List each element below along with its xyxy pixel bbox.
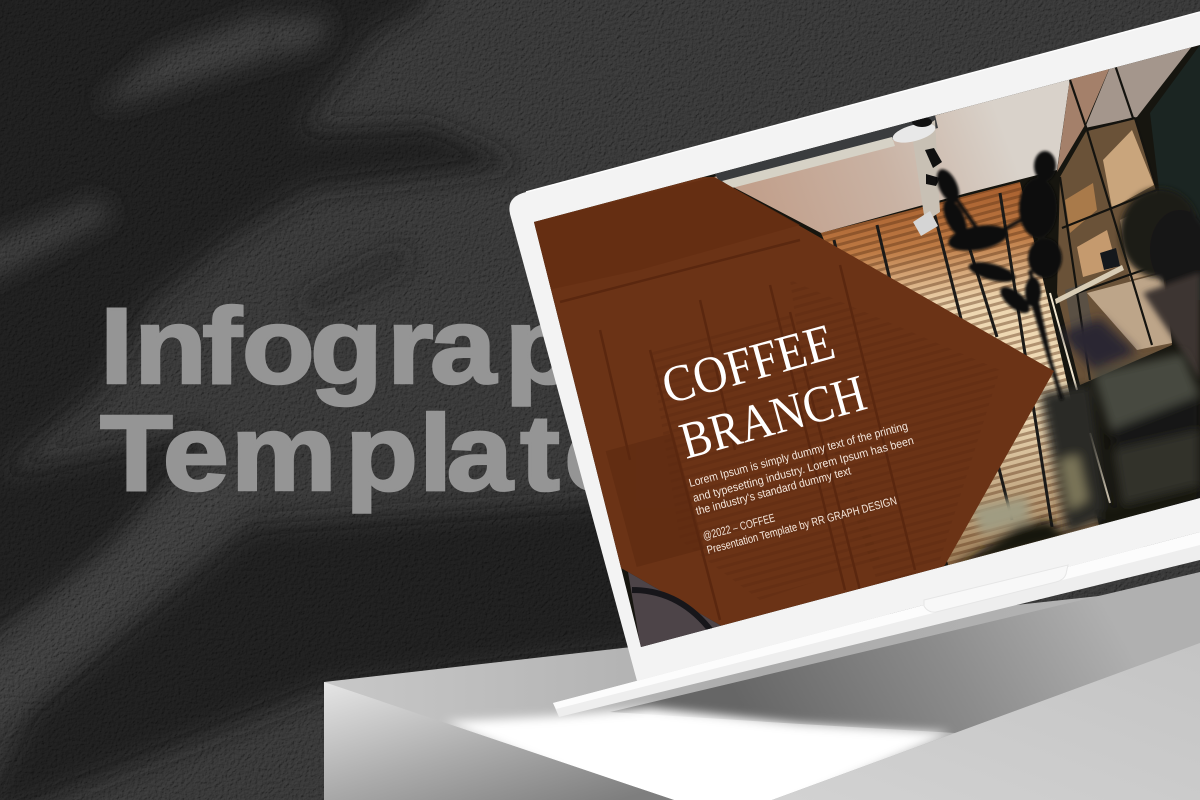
dark right side wall	[1150, 45, 1200, 220]
brown overlay shape	[500, 177, 1054, 640]
window blinds	[821, 182, 1100, 570]
laptop bezel	[509, 12, 1200, 681]
window dark mullions	[834, 193, 1052, 527]
table back top surface	[324, 585, 1200, 800]
screen body paragraph: Lorem Ipsum is simply dummy text of the printing	[688, 421, 909, 490]
laptop	[500, 12, 1200, 717]
track lights	[891, 117, 942, 236]
screen body paragraph: and typesetting industry. Lorem Ipsum has been	[692, 435, 915, 505]
table right face	[772, 643, 1200, 800]
window frame highlight	[1050, 293, 1110, 503]
screen title: COFFEE BRANCH	[656, 314, 872, 471]
white pedestal table	[324, 572, 1200, 800]
table left face	[324, 682, 674, 800]
leaf shadow dark shapes	[0, 0, 650, 800]
screen body paragraph: the industry's standard dummy text	[695, 465, 853, 518]
overlay interior ghost photo	[560, 239, 916, 620]
laptop cast shadow	[610, 572, 1200, 733]
title line one: COFFEE	[656, 314, 841, 416]
bezel rim	[526, 12, 1200, 192]
headline line two: Template	[100, 393, 630, 514]
leaf light patches	[0, 12, 330, 730]
ceiling rail	[714, 115, 938, 185]
laptop base	[553, 532, 1200, 717]
screen credit lines: @2022 – COFFEE	[702, 512, 777, 543]
bottom left photo corner	[628, 572, 725, 650]
right wall shelving	[1055, 65, 1172, 385]
screen photo	[534, 45, 1200, 647]
plant silhouette	[932, 151, 1062, 400]
background headline	[100, 286, 728, 514]
title line two: BRANCH	[674, 365, 872, 471]
ceiling	[714, 78, 1070, 233]
screen credit lines	[702, 495, 898, 557]
bright light patch	[445, 708, 950, 800]
foreground blurred counter	[950, 318, 1200, 570]
headline line one: Infographic	[100, 286, 728, 407]
screen credit lines: Presentation Template by RR GRAPH DESIGN	[706, 495, 898, 557]
dark figure	[1120, 188, 1200, 380]
trackpad notch	[924, 565, 1068, 612]
